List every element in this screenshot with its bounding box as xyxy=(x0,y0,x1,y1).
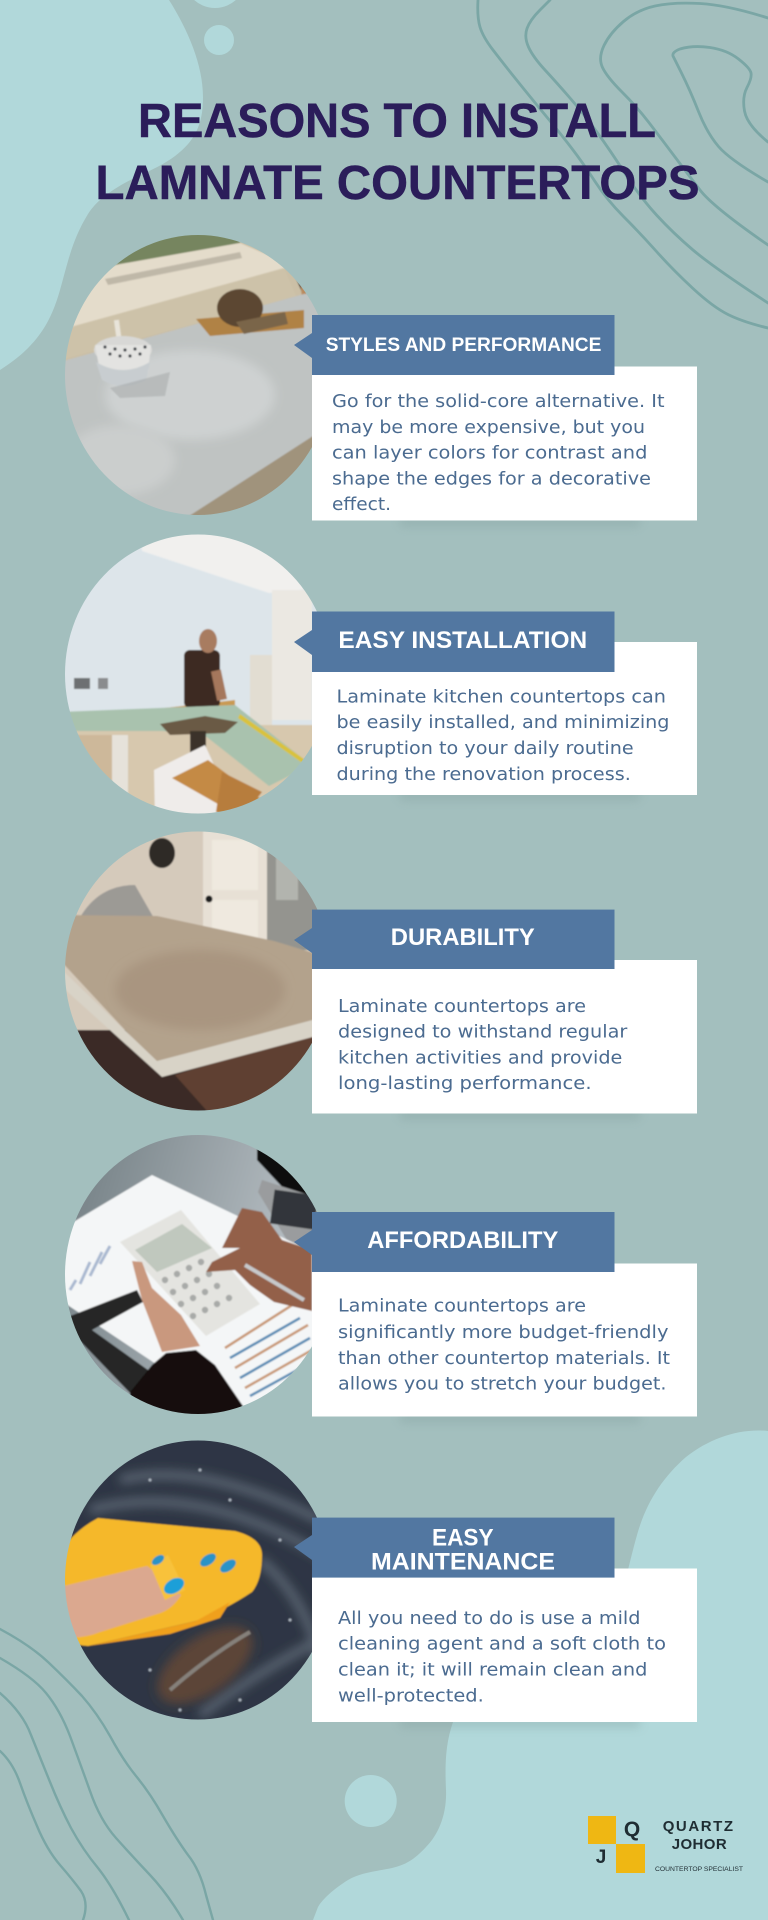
text: affordability: Laminate countertops are xyxy=(338,1297,586,1317)
banner: durability xyxy=(294,910,614,969)
panel: easy maintenance xyxy=(294,1518,697,1727)
contour lines: bottom left xyxy=(0,1629,213,1920)
banner: affordability xyxy=(294,1212,614,1272)
decorative circle: bottom xyxy=(345,1775,397,1827)
banner: easy maintenance xyxy=(294,1518,614,1578)
photo: kitchen counter with bowl and bread xyxy=(65,235,318,515)
logo: Quartz Johor: J xyxy=(596,1847,606,1868)
logo: Quartz Johor: QUARTZ xyxy=(663,1818,733,1835)
title: REASONS TO INSTALL xyxy=(138,95,656,148)
text: easy installation: Laminate kitchen countertops can xyxy=(336,688,666,708)
photo: hands on a calculator over charts xyxy=(65,1135,317,1414)
decorative blob: top left xyxy=(0,0,203,370)
banner: easy installation xyxy=(294,612,614,672)
banner: easy installation: EASY INSTALLATION xyxy=(338,627,587,654)
text: affordability: allows you to stretch your budget. xyxy=(338,1374,666,1394)
photo: granite-look laminate island xyxy=(65,832,318,1110)
decorative blob: bottom right xyxy=(313,1430,768,1920)
photo: hand wiping dark granite with yellow cloth xyxy=(65,1440,317,1720)
title xyxy=(96,95,700,210)
panel: easy installation xyxy=(294,612,697,800)
text: easy installation: disruption to your daily routine xyxy=(336,739,634,759)
banner: easy maintenance: MAINTENANCE xyxy=(371,1548,555,1575)
text: easy installation: be easily installed, and minimizing xyxy=(336,713,670,733)
text: durability xyxy=(338,997,628,1094)
text: easy maintenance: cleaning agent and a soft cloth to xyxy=(338,1635,666,1655)
text: easy installation: during the renovation process. xyxy=(336,765,631,785)
text: affordability xyxy=(338,1297,670,1394)
banner: styles and performance xyxy=(294,315,614,375)
decorative circle: top small xyxy=(204,25,234,55)
text: easy maintenance: well-protected. xyxy=(338,1686,484,1706)
text: easy maintenance: clean it; it will remain clean and xyxy=(338,1661,647,1681)
text: durability: Laminate countertops are xyxy=(338,997,586,1017)
photo: man installing countertop xyxy=(65,534,317,814)
text: styles and performance xyxy=(332,392,665,515)
logo: Quartz Johor: Q xyxy=(624,1818,640,1841)
text: styles and performance: shape the edges for a decorative xyxy=(332,470,651,490)
banner: durability: DURABILITY xyxy=(391,924,535,951)
text: durability: kitchen activities and provide xyxy=(338,1048,622,1068)
text: easy maintenance: All you need to do is use a mild xyxy=(338,1609,640,1629)
panel: affordability xyxy=(294,1212,697,1422)
banner: affordability: AFFORDABILITY xyxy=(367,1227,558,1254)
logo: Quartz Johor xyxy=(588,1816,743,1873)
text: styles and performance: effect. xyxy=(332,495,391,515)
text: styles and performance: Go for the solid-core alternative. It xyxy=(332,392,665,412)
contour lines: top right xyxy=(478,0,768,328)
text: easy maintenance xyxy=(338,1609,666,1706)
text: affordability: than other countertop materials. It xyxy=(338,1349,670,1369)
title: LAMNATE COUNTERTOPS xyxy=(96,157,700,210)
logo: Quartz Johor: JOHOR xyxy=(672,1836,727,1853)
panel: styles and performance xyxy=(294,315,697,526)
text: easy installation xyxy=(336,688,670,785)
text: styles and performance: may be more expensive, but you xyxy=(332,418,645,438)
logo: Quartz Johor: COUNTERTOP SPECIALIST xyxy=(655,1866,743,1873)
panel: durability xyxy=(294,910,697,1119)
decorative circle: top edge xyxy=(183,0,247,8)
text: durability: long-lasting performance. xyxy=(338,1074,592,1094)
text: durability: designed to withstand regular xyxy=(338,1022,628,1042)
banner: easy maintenance: EASY xyxy=(432,1525,494,1552)
banner: styles and performance: STYLES AND PERFORMANCE xyxy=(326,334,601,356)
text: affordability: significantly more budget-friendly xyxy=(338,1323,668,1343)
text: styles and performance: can layer colors for contrast and xyxy=(332,444,647,464)
